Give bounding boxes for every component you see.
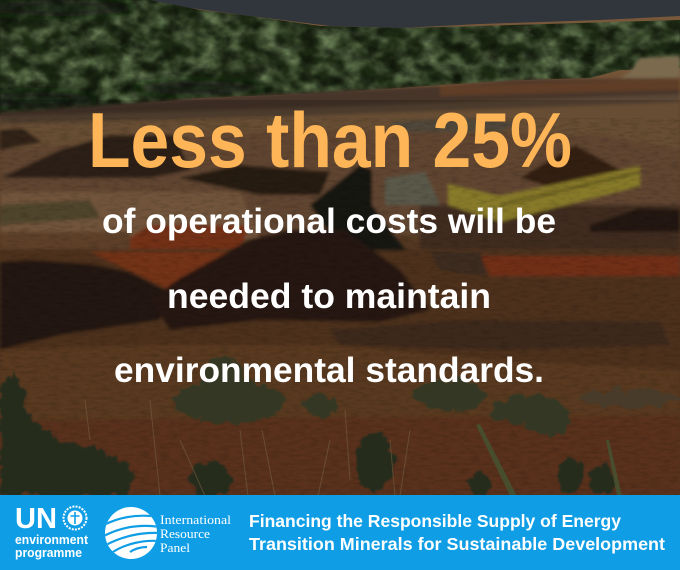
logo wordmark: International [160, 513, 232, 527]
line 2: needed to maintain [167, 277, 491, 316]
logo wordmark [160, 513, 232, 555]
dark ore piles upper [0, 135, 190, 178]
UN environment programme logo: programme [15, 546, 82, 560]
forest [0, 0, 680, 118]
report title: Transition Minerals for Sustainable Development [249, 534, 665, 554]
UN environment programme logo: UN [15, 503, 57, 535]
International Resource Panel logo [102, 507, 232, 559]
footer bar [0, 495, 680, 570]
icon: UNEP wreath emblem [64, 506, 86, 530]
report title [249, 511, 665, 554]
dark machinery [310, 165, 420, 270]
headline: Less than 25% [88, 96, 572, 184]
distant hills and sky [140, 0, 680, 28]
mine: lower piles and red bank [0, 230, 680, 420]
UN environment programme logo [15, 503, 89, 560]
foreground red soil [0, 416, 680, 496]
grass blades [476, 424, 622, 496]
bushes [173, 357, 680, 435]
report title: Financing the Responsible Supply of Energy [249, 511, 621, 531]
yellow conveyor [448, 166, 640, 222]
dry grass stalks [85, 400, 410, 496]
foreground plants [0, 372, 614, 496]
photo darkening overlay [0, 100, 680, 496]
logo wordmark: Resource [160, 527, 210, 541]
soil grain texture [0, 118, 680, 496]
line 1: of operational costs will be [102, 202, 556, 241]
icon: globe [105, 507, 157, 559]
UN environment programme logo: environment [15, 533, 89, 547]
logo wordmark: Panel [160, 541, 191, 555]
mine: terraces [0, 56, 680, 270]
line 3: environmental standards. [114, 351, 544, 390]
statement text [102, 202, 556, 390]
